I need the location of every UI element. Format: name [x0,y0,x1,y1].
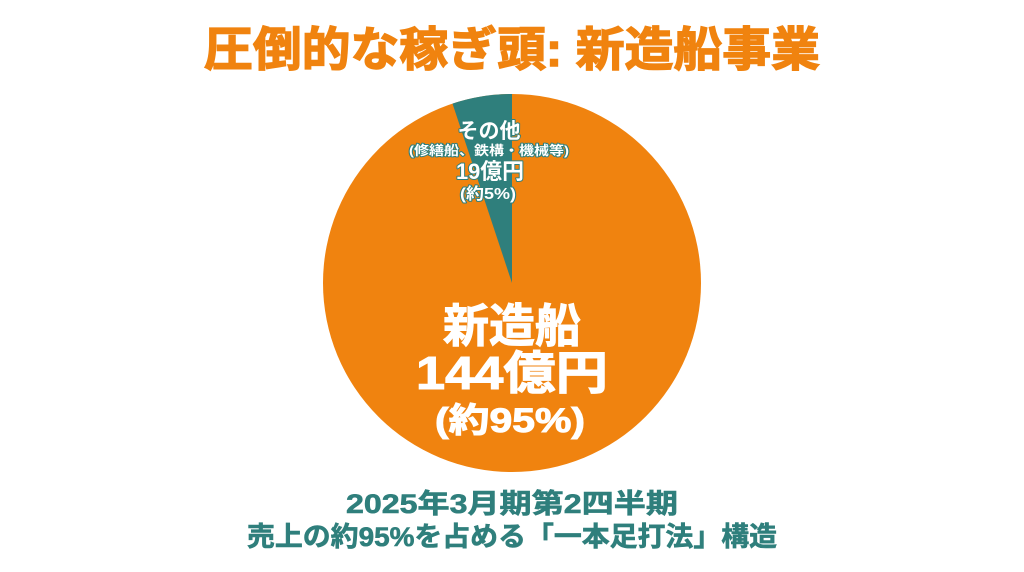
pie slice: その他 5% [452,94,512,283]
label: その他 [409,120,569,203]
pie slice: 新造船 95% [323,94,701,472]
label: その他: (約5%) [460,185,516,203]
label: その他: 19億円 [456,159,524,184]
label: その他: その他 [458,120,520,143]
subtitle: 売上の約95%を占める「一本足打法」構造 [247,522,777,552]
pie chart [323,94,701,472]
label: その他: (修繕船、鉄構・機械等) [409,143,569,158]
label: 新造船: 新造船 [443,300,581,352]
label: 新造船 [416,300,608,440]
subtitle: 2025年3月期第2四半期 [346,489,678,519]
title: 圧倒的な稼ぎ頭: 新造船事業 [204,23,820,76]
label: 新造船: (約95%) [435,402,585,440]
label: 新造船: 144億円 [416,347,608,399]
subtitle [247,489,777,552]
